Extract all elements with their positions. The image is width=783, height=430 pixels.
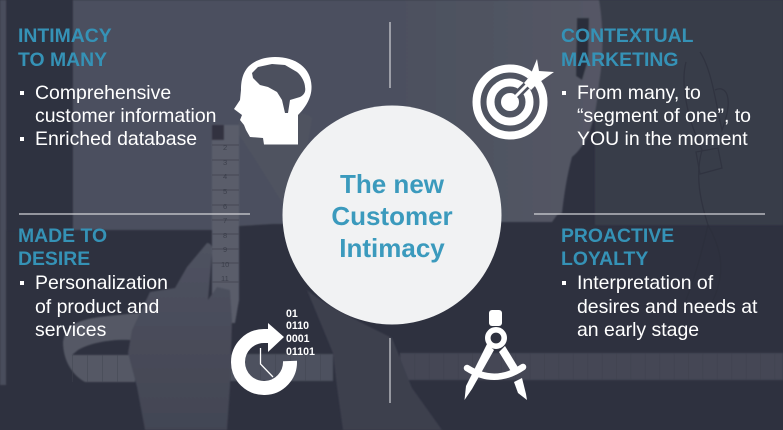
tape right of sleeve xyxy=(400,353,783,380)
central circle xyxy=(282,106,502,324)
panel: intimacy to many xyxy=(18,25,216,150)
tape loop left xyxy=(63,310,190,382)
binary digits: 01101 xyxy=(286,346,315,358)
heading: proactive loyalty: LOYALTY xyxy=(561,248,648,270)
bullet list: intimacy to many: Enriched database xyxy=(35,128,197,150)
heading: contextual marketing: MARKETING xyxy=(561,49,678,71)
panel: contextual marketing xyxy=(561,25,751,150)
bullet list: contextual marketing: From many, to xyxy=(577,82,701,104)
binary digits: 01 xyxy=(286,308,298,320)
panel: made to desire xyxy=(18,225,168,341)
central title: Intimacy xyxy=(339,233,445,263)
heading: proactive loyalty: PROACTIVE xyxy=(561,225,674,247)
upper hand xyxy=(239,112,312,205)
bullet list: made to desire: services xyxy=(35,319,107,341)
central title: The new xyxy=(340,169,445,199)
bullet list: made to desire: of product and xyxy=(35,296,159,318)
heading: intimacy to many: INTIMACY xyxy=(18,25,112,47)
ruler numbers: 10 xyxy=(221,260,229,269)
tape behind clock icon xyxy=(230,354,333,381)
heading: made to desire: DESIRE xyxy=(18,248,90,270)
heading: made to desire: MADE TO xyxy=(18,225,107,247)
ruler numbers: 3 xyxy=(223,158,227,167)
bullet list: intimacy to many: customer information xyxy=(35,105,216,127)
bullet list: proactive loyalty xyxy=(562,272,758,341)
binary digits: 0001 xyxy=(286,333,310,345)
ruler numbers: 6 xyxy=(223,202,227,211)
bullet list: contextual marketing: “segment of one”, to xyxy=(577,105,751,127)
bullet list: proactive loyalty: Interpretation of xyxy=(577,272,714,294)
ruler numbers: 5 xyxy=(223,187,227,196)
ruler numbers: 2 xyxy=(223,143,227,152)
sleeve xyxy=(307,290,442,430)
bullet list: contextual marketing: YOU in the moment xyxy=(577,128,748,150)
panel: proactive loyalty xyxy=(561,225,758,341)
ruler numbers: 8 xyxy=(223,231,227,240)
bullet list: intimacy to many xyxy=(20,82,216,150)
hand xyxy=(128,243,232,430)
bullet list: intimacy to many: Comprehensive xyxy=(35,82,171,104)
heading: contextual marketing: CONTEXTUAL xyxy=(561,25,694,47)
ruler numbers: 4 xyxy=(223,172,227,181)
icon: clock arrow with binary data xyxy=(238,308,315,388)
central title: Customer xyxy=(331,201,453,231)
icon: head with brain xyxy=(234,57,312,144)
bullet list: made to desire xyxy=(20,272,168,341)
bullet list: proactive loyalty: an early stage xyxy=(577,319,699,341)
heading: intimacy to many: TO MANY xyxy=(18,49,107,71)
bullet list: contextual marketing xyxy=(562,82,751,150)
icon: target with arrow xyxy=(476,59,554,136)
icon: drafting compass xyxy=(464,310,527,400)
ruler xyxy=(212,125,239,323)
binary digits: 0110 xyxy=(286,320,309,332)
ruler numbers: 11 xyxy=(221,274,229,283)
ruler numbers: 9 xyxy=(223,245,227,254)
ruler numbers: 7 xyxy=(223,216,227,225)
bullet list: made to desire: Personalization xyxy=(35,272,168,294)
bullet list: proactive loyalty: desires and needs at xyxy=(577,296,758,318)
